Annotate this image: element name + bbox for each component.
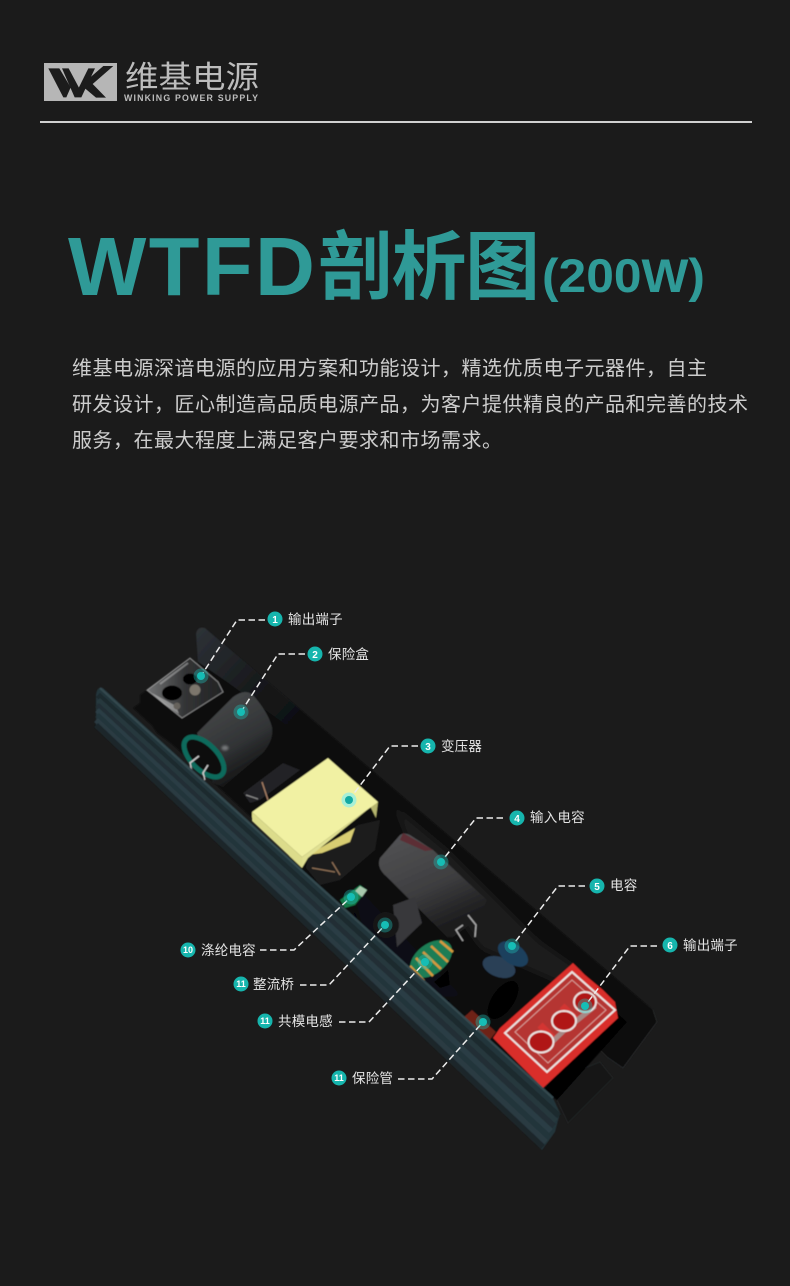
output terminal 1 xyxy=(140,658,228,750)
callout 4: 输入电容 xyxy=(530,809,585,825)
common mode inductor xyxy=(403,932,459,988)
intro paragraph: 服务，在最大程度上满足客户要求和市场需求。 xyxy=(72,429,502,452)
callout 5 xyxy=(504,877,637,954)
callout 1: 输出端子 xyxy=(288,612,343,627)
callout 10 xyxy=(180,890,358,958)
callout 6 xyxy=(578,938,738,1014)
callout 11 inductor xyxy=(258,954,432,1029)
callout 11 inductor: 11 xyxy=(260,1016,270,1026)
callout 11 inductor: 共模电感 xyxy=(278,1013,333,1029)
title: WTFD xyxy=(68,220,315,313)
title: 剖析图 xyxy=(318,225,540,309)
output terminal 6 (red) xyxy=(493,963,618,1088)
callout 5: 电容 xyxy=(610,877,637,893)
intro paragraph: 研发设计，匠心制造高品质电源产品，为客户提供精良的产品和完善的技术 xyxy=(72,393,748,416)
title: (200W) xyxy=(542,249,705,302)
input capacitor xyxy=(379,833,487,941)
callout 10: 10 xyxy=(183,945,193,955)
callout 5: 5 xyxy=(594,882,600,893)
logo chinese name: 维基电源 xyxy=(125,60,259,95)
logo english name: WINKING POWER SUPPLY xyxy=(124,93,258,103)
callout 11 fuse xyxy=(332,1014,490,1086)
callout 3 xyxy=(342,738,482,808)
intro paragraph xyxy=(72,357,748,452)
title xyxy=(68,220,705,313)
callout 2: 2 xyxy=(312,650,318,661)
black tray below red terminal xyxy=(543,1013,627,1100)
blue capacitors xyxy=(480,936,533,982)
callout 6: 输出端子 xyxy=(683,938,738,953)
callout 10: 涤纶电容 xyxy=(201,942,256,958)
board floor xyxy=(133,662,617,1100)
callout 1: 1 xyxy=(272,615,278,626)
back wall xyxy=(196,628,653,1100)
callout 11 fuse: 保险管 xyxy=(352,1071,393,1086)
callout 3: 变压器 xyxy=(441,739,482,754)
logo xyxy=(44,60,259,103)
transformer xyxy=(252,758,378,868)
callout 2: 保险盒 xyxy=(328,646,369,662)
callout 2 xyxy=(234,646,369,720)
logo mark xyxy=(44,63,117,101)
product: power supply cutaway xyxy=(96,628,657,1150)
callout 1 xyxy=(194,612,343,684)
callout 4 xyxy=(434,809,585,870)
rectifier bridge xyxy=(373,897,422,947)
dark capacitor near fuse xyxy=(481,976,525,1024)
green film capacitor xyxy=(340,885,367,908)
lower tail flap xyxy=(557,1062,613,1123)
aluminium side rail xyxy=(96,688,560,1150)
callout 11 rectifier: 整流桥 xyxy=(253,977,294,992)
intro paragraph: 维基电源深谙电源的应用方案和功能设计，精选优质电子元器件，自主 xyxy=(72,357,708,380)
right tail flap xyxy=(600,985,657,1068)
callout 3: 3 xyxy=(425,742,431,753)
callout 11 fuse: 11 xyxy=(334,1073,344,1083)
floor folds xyxy=(345,800,590,1000)
coil under transformer xyxy=(243,763,300,803)
lower transformer coil xyxy=(306,820,380,885)
fuse xyxy=(463,1010,496,1042)
callout 6: 6 xyxy=(667,941,673,952)
capacitor with green ring xyxy=(177,692,272,787)
callout 11 rectifier: 11 xyxy=(236,979,246,989)
callout 4: 4 xyxy=(514,814,520,825)
callout 11 rectifier xyxy=(234,918,392,992)
header rule xyxy=(40,121,752,123)
